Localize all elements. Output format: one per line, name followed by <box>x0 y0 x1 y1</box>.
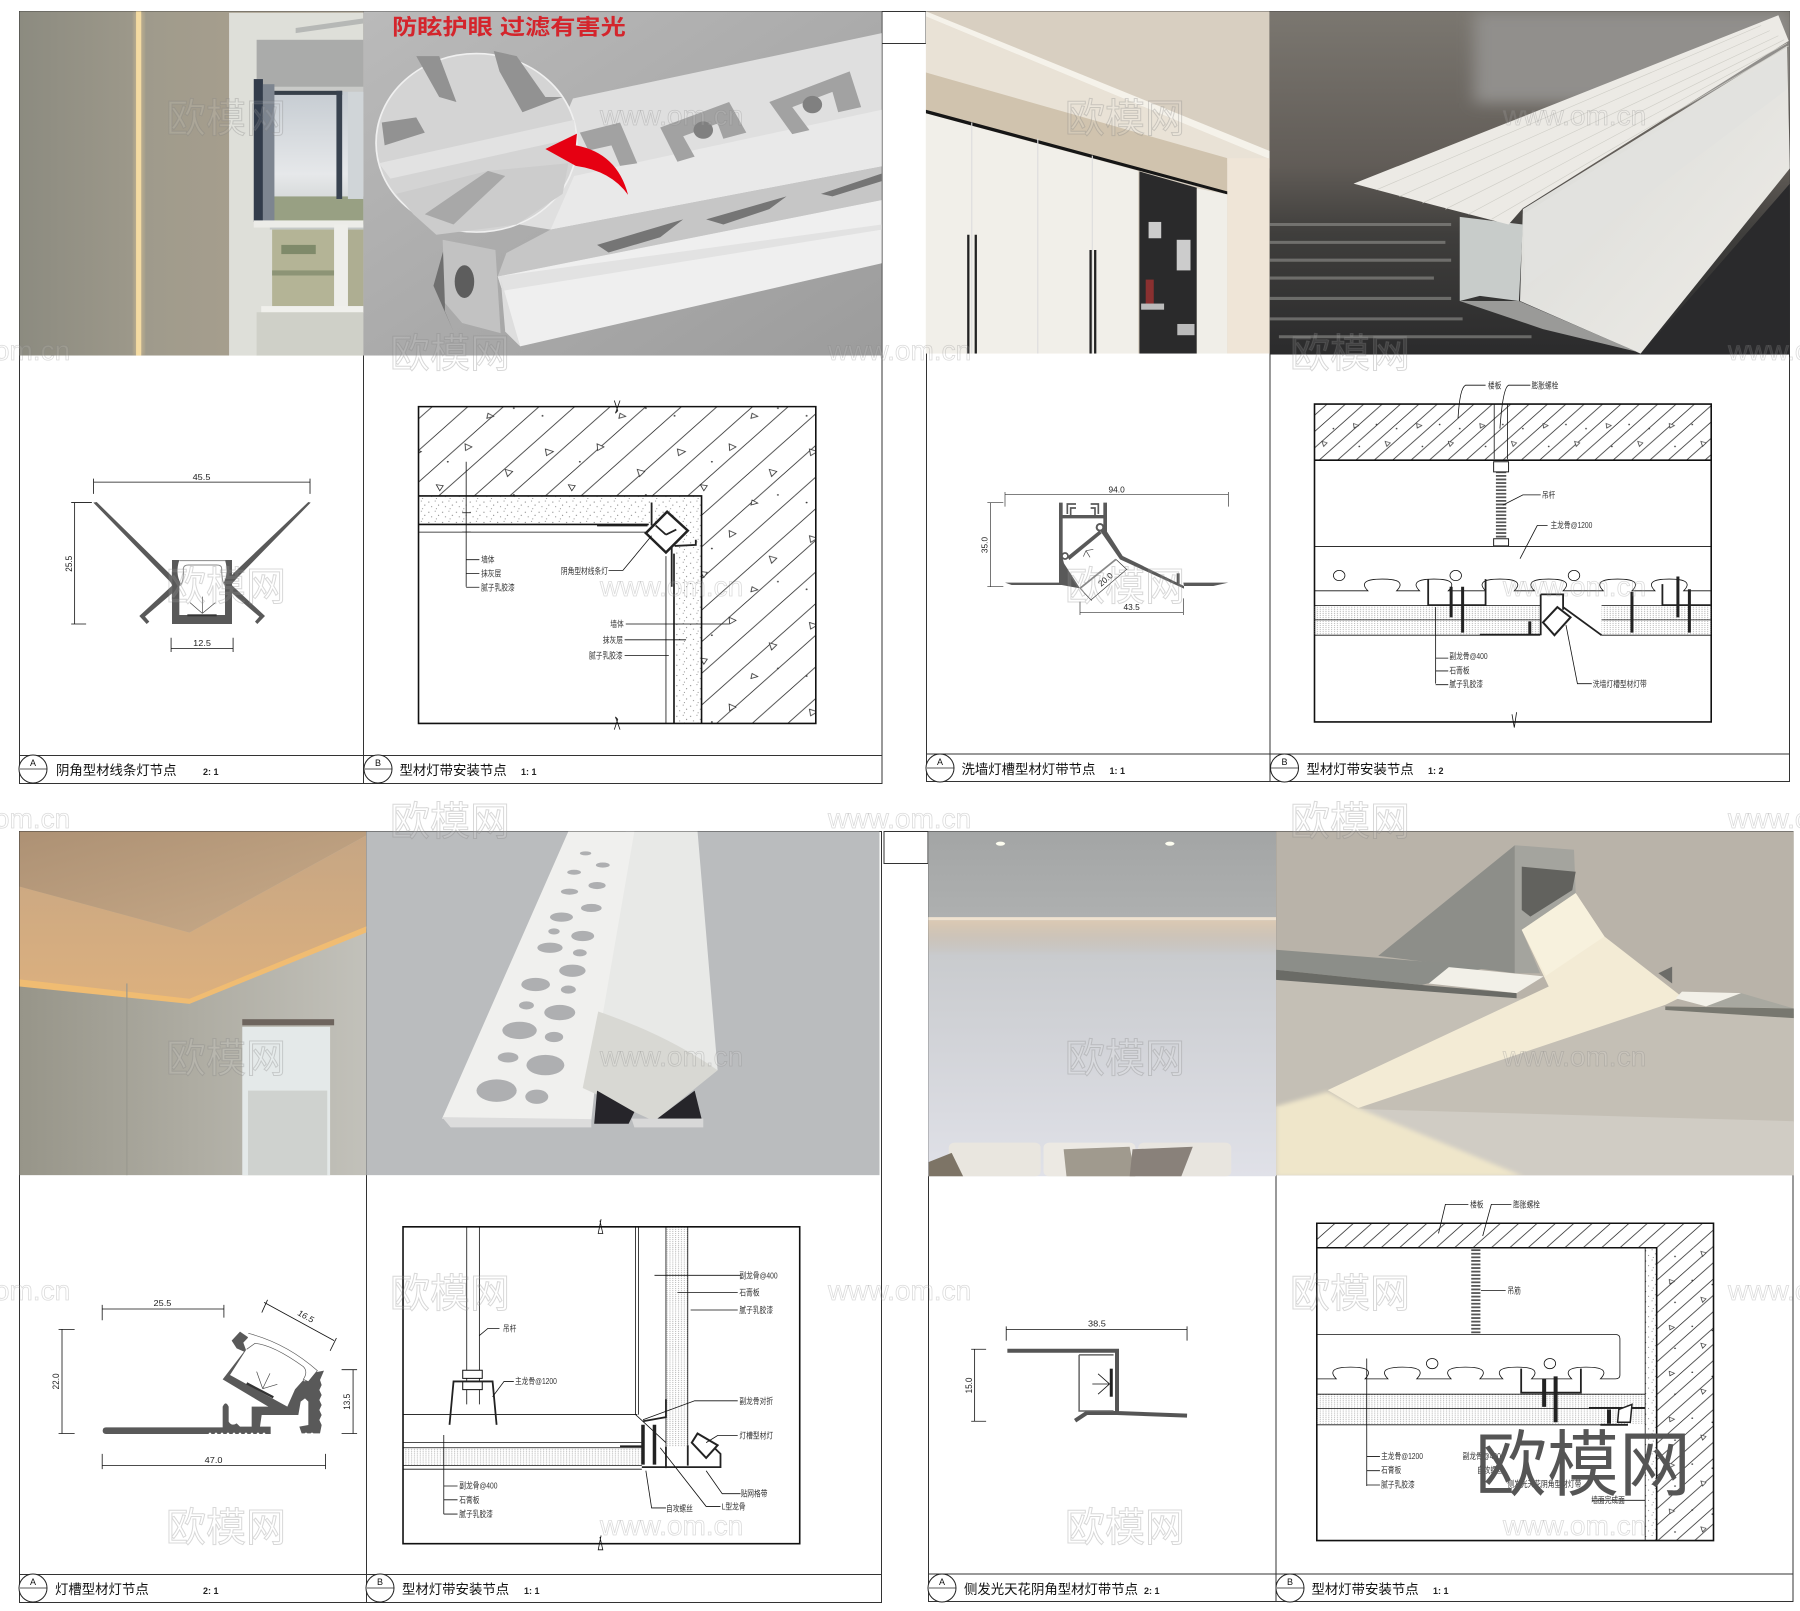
watermarks: om.cn tiled overlay: 欧模网 <box>390 321 510 379</box>
drawing B: corner profile installation node: 墙体 <box>610 618 624 629</box>
drawing B: corner profile installation node: 腻子乳胶漆 <box>481 581 515 593</box>
drawing B: side-light installation node: 腻子乳胶漆 <box>1381 1479 1415 1490</box>
drawing B: cove installation node: 灯槽型材灯 <box>739 1430 773 1441</box>
drawing B: side-light installation node: 墙面完成面 <box>1591 1494 1625 1505</box>
drawing B: corner profile installation node: 阴角型材线条灯 <box>561 565 608 576</box>
drawing B: cove installation node: 副龙骨@400 <box>739 1269 778 1281</box>
title bar A: 2: 1 <box>203 767 219 777</box>
drawing A: wall washer profile section <box>979 485 1228 615</box>
watermarks: om.cn tiled overlay: www.om.cn <box>599 100 743 131</box>
photo: anti-glare profile close-up <box>363 11 882 356</box>
panel: bottom-left detail set <box>19 831 928 1602</box>
title bar B <box>364 755 537 783</box>
watermarks: om.cn tiled overlay: www.om.cn <box>599 1041 743 1072</box>
photo: ceiling cove light room <box>20 831 366 1175</box>
watermarks: om.cn tiled overlay: 欧模网 <box>390 789 510 847</box>
photo: anti-glare profile close-up: 防眩护眼 过滤有害光 <box>392 15 626 39</box>
title bar A: 阴角型材线条灯节点 <box>56 762 177 778</box>
drawing B: side-light installation node: 楼板 <box>1470 1199 1484 1210</box>
drawing A: wall washer profile section: 43.5 <box>1124 602 1140 612</box>
watermarks: om.cn tiled overlay: 欧模网 <box>1290 1261 1410 1319</box>
drawing B: corner profile installation node: 腻子乳胶漆 <box>589 650 623 661</box>
title bar A: 2: 1 <box>1144 1586 1160 1596</box>
drawing A: cove profile dimensions <box>51 1298 357 1469</box>
drawing B: wall washer installation node: 吊杆 <box>1542 489 1556 500</box>
drawing A: cove profile dimensions: 22.0 <box>51 1373 61 1389</box>
drawing B: wall washer installation node: 腻子乳胶漆 <box>1449 678 1483 689</box>
watermarks: om.cn tiled overlay: 欧模网 <box>166 86 286 144</box>
photo: corner light strip room <box>20 11 363 356</box>
photo: perforated trim profile <box>366 831 880 1175</box>
watermarks: om.cn tiled overlay: www.om.cn <box>827 1275 971 1306</box>
title bar B: 型材灯带安装节点 <box>1306 762 1414 777</box>
watermarks: om.cn tiled overlay: www.om.cn <box>827 335 971 366</box>
watermarks: om.cn tiled overlay: 欧模网 <box>166 1495 286 1553</box>
title bar A <box>926 754 1125 782</box>
drawing B: cove installation node: 腻子乳胶漆 <box>459 1508 493 1519</box>
title bar B: 型材灯带安装节点 <box>402 1582 509 1597</box>
frame: bottom-right detail sheet <box>928 831 1793 1602</box>
drawing B: cove installation node: 副龙骨对折 <box>739 1395 773 1406</box>
drawing A: side-light profile section: 38.5 <box>1088 1319 1106 1328</box>
title bar B: B <box>375 758 381 768</box>
title bar A: A <box>30 758 36 768</box>
drawing B: wall washer installation node: 膨胀螺栓 <box>1532 379 1559 390</box>
watermarks: om.cn tiled overlay: www.om.cn <box>1502 571 1646 602</box>
drawing B: cove installation node: L型龙骨 <box>722 1501 746 1512</box>
drawing B: cove installation node: 腻子乳胶漆 <box>739 1304 773 1315</box>
drawing B: side-light installation node: 吊筋 <box>1507 1285 1521 1296</box>
drawing B: wall washer installation node: 主龙骨@1200 <box>1550 519 1592 530</box>
drawing A: cove profile dimensions: 16.5 <box>296 1308 316 1325</box>
title bar A: 灯槽型材灯节点 <box>55 1582 149 1597</box>
title bar A <box>928 1574 1160 1602</box>
drawing B: side-light installation node: 主龙骨@1200 <box>1381 1450 1423 1461</box>
drawing B: corner profile installation node: 抹灰层 <box>603 634 623 645</box>
drawing B: cove installation node: 石膏板 <box>459 1494 480 1505</box>
watermarks: om.cn tiled overlay: 欧模网 <box>1290 789 1410 847</box>
drawing A: cove profile dimensions: 13.5 <box>342 1394 352 1410</box>
drawing B: cove installation node: 自攻螺丝 <box>666 1503 693 1514</box>
drawing B: corner profile installation node: 墙体 <box>481 554 495 565</box>
drawing A: cove profile dimensions: 47.0 <box>205 1456 223 1465</box>
title bar A: A <box>30 1577 36 1587</box>
drawing B: corner profile installation node <box>419 401 816 730</box>
title bar B: B <box>1281 757 1288 767</box>
drawing A: corner profile section <box>93 502 311 624</box>
frame: top-right detail sheet <box>926 11 1790 782</box>
watermarks: om.cn tiled overlay: 欧模网 <box>1290 321 1410 379</box>
title bar B <box>366 1574 540 1602</box>
title bar A <box>19 755 219 783</box>
watermarks: om.cn tiled overlay: 欧模网 <box>166 1026 286 1084</box>
title bar B <box>1270 754 1444 782</box>
drawing B: side-light installation node: 膨胀螺栓 <box>1513 1199 1540 1210</box>
drawing A: corner profile dimensions: 12.5 <box>193 638 211 648</box>
frame: bottom-left detail sheet <box>20 831 928 1602</box>
title bar B: 1: 2 <box>1428 766 1444 776</box>
frame: top-left detail sheet <box>20 11 926 784</box>
watermarks: om.cn tiled overlay: www.om.cn <box>1502 1041 1646 1072</box>
drawing A: corner profile dimensions <box>63 473 310 652</box>
title bar A <box>19 1574 219 1602</box>
title bar B: 1: 1 <box>1433 1586 1449 1596</box>
title bar A: 侧发光天花阴角型材灯带节点 <box>964 1582 1138 1597</box>
drawing B: side-light installation node: 副龙骨@400 <box>1463 1450 1501 1461</box>
watermarks: om.cn tiled overlay: 欧模网 <box>166 554 286 612</box>
drawing A: corner profile dimensions: 45.5 <box>193 473 211 482</box>
watermarks: om.cn tiled overlay: 欧模网 <box>1065 1495 1185 1553</box>
drawing B: cove installation node: 副龙骨@400 <box>459 1480 497 1491</box>
watermarks: om.cn tiled overlay: 欧模网 <box>1065 86 1185 144</box>
drawing B: side-light installation node <box>1317 1199 1713 1541</box>
title bar A: A <box>937 757 943 767</box>
drawing B: corner profile installation node: 抹灰层 <box>481 568 501 579</box>
title bar B: 1: 1 <box>524 1586 540 1596</box>
drawing A: side-light profile section <box>963 1319 1187 1421</box>
drawing A: wall washer profile section: 94.0 <box>1109 485 1125 495</box>
watermarks: om.cn tiled overlay: www.om.cn <box>1502 1510 1646 1541</box>
title bar A: 2: 1 <box>203 1586 219 1596</box>
drawing B: side-light installation node: 自攻螺丝 <box>1477 1464 1504 1475</box>
panel: top-right detail set <box>926 11 1790 782</box>
drawing B: cove installation node: 贴网格带 <box>741 1488 768 1499</box>
watermarks: om.cn tiled overlay: www.om.cn <box>599 1510 743 1541</box>
drawing A: wall washer profile section: 20.0 <box>1096 570 1115 588</box>
drawing B: side-light installation node: 石膏板 <box>1381 1464 1401 1475</box>
photo: side-lit ceiling with sofa <box>928 831 1276 1176</box>
title bar B <box>1276 1574 1449 1602</box>
drawing B: wall washer installation node: 洗墙灯槽型材灯带 <box>1593 678 1647 689</box>
title bar A: 洗墙灯槽型材灯带节点 <box>962 762 1095 777</box>
title bar B: 型材灯带安装节点 <box>400 763 507 778</box>
panel: top-left detail set <box>19 11 926 784</box>
drawing B: cove installation node: 石膏板 <box>739 1287 760 1298</box>
title bar B: 型材灯带安装节点 <box>1312 1582 1419 1597</box>
photo: wall wash profile render <box>1276 831 1794 1176</box>
watermarks: om.cn tiled overlay: 欧模网 <box>1065 1026 1185 1084</box>
drawing A: cove profile section <box>103 1332 324 1435</box>
drawing B: cove installation node <box>403 1219 800 1550</box>
watermark: large 欧模网: 欧模网 <box>1475 1406 1691 1511</box>
drawing B: side-light installation node: 侧发光天花阴角型材灯带 <box>1507 1478 1582 1489</box>
watermarks: om.cn tiled overlay: 欧模网 <box>1065 554 1185 612</box>
panel: bottom-right detail set <box>928 831 1794 1602</box>
drawing A: wall washer profile section: 35.0 <box>979 537 989 553</box>
photo: wall washer ceiling room <box>926 11 1270 354</box>
title bar A: 1: 1 <box>1110 766 1125 776</box>
title bar B: 1: 1 <box>521 767 537 777</box>
drawing B: cove installation node: 主龙骨@1200 <box>515 1375 557 1386</box>
watermarks: om.cn tiled overlay: www.om.cn <box>1502 100 1646 131</box>
photo: ribbed white profile on dark wood <box>1270 11 1790 355</box>
title bar B: B <box>1287 1577 1293 1587</box>
drawing B: wall washer installation node <box>1315 379 1711 728</box>
watermarks: om.cn tiled overlay: www.om.cn <box>827 803 971 834</box>
watermarks: om.cn tiled overlay: 欧模网 <box>390 1261 510 1319</box>
drawing B: wall washer installation node: 石膏板 <box>1449 665 1470 676</box>
drawing B: cove installation node: 吊杆 <box>503 1322 517 1334</box>
drawing A: cove profile dimensions: 25.5 <box>154 1298 172 1308</box>
drawing B: wall washer installation node: 楼板 <box>1488 379 1502 390</box>
title bar B: B <box>377 1577 383 1587</box>
title bar A: A <box>939 1577 945 1587</box>
drawing A: corner profile dimensions: 25.5 <box>63 556 74 572</box>
watermarks: om.cn tiled overlay: www.om.cn <box>599 571 743 602</box>
drawing B: wall washer installation node: 副龙骨@400 <box>1449 650 1488 661</box>
drawing A: side-light profile section: 15.0 <box>963 1377 974 1393</box>
